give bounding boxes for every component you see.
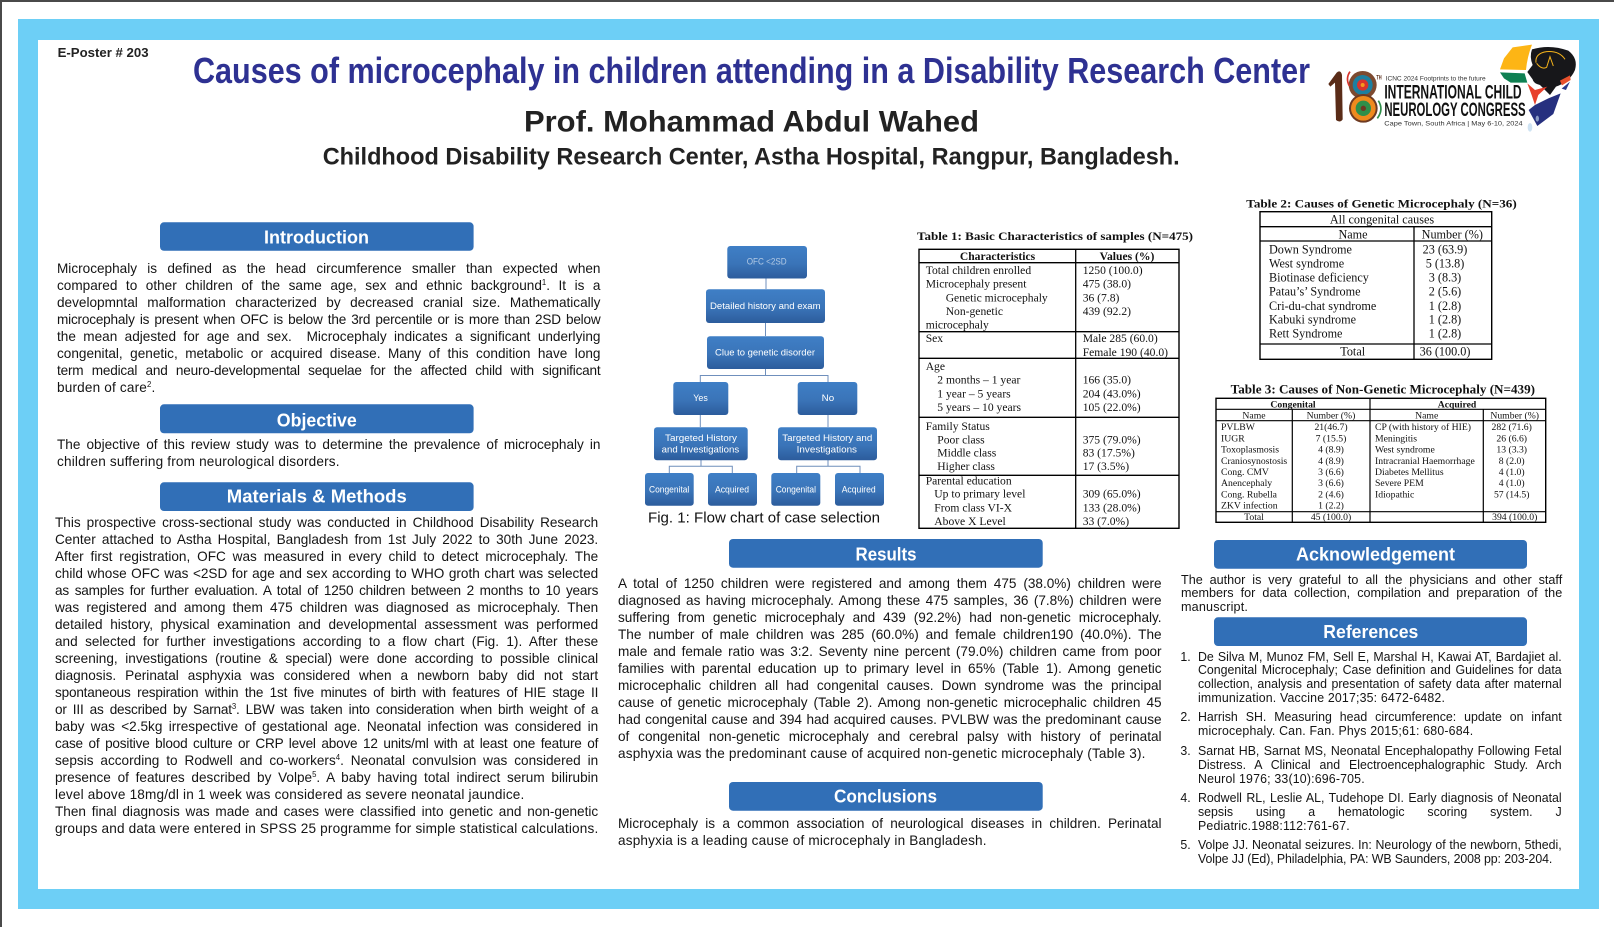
text: materials and methods: and selected for further investigations according to a flow chart (Fig. 1). After these [55, 633, 598, 649]
congress logo [1328, 45, 1576, 132]
table 2: Name [1338, 227, 1368, 241]
box: acquired 2: Acquired [842, 484, 876, 495]
heading: Objective [160, 404, 474, 433]
text: introduction: compared to other children of the same age, sex and ethnic background1. It is a [57, 277, 601, 293]
table 1 title: Table 1: Basic Characteristics of samples (N=475) [917, 229, 1193, 243]
text: materials and methods: groups and data were entered in SPSS 25 programme for simple statistical calculations. [55, 820, 598, 836]
references list: 4. [1181, 790, 1191, 805]
table 2: 1 (2.8) [1429, 299, 1461, 313]
text: acknowledgement [1181, 572, 1562, 614]
table 3: Congenital [1270, 399, 1316, 410]
heading: Results [729, 539, 1043, 568]
table 1: Genetic microcephaly [946, 292, 1048, 305]
table 1: 439 (92.2) [1083, 305, 1131, 318]
table 3 title: Table 3: Causes of Non-Genetic Microcephaly (N=439) [1231, 382, 1535, 396]
table 2: 1 (2.8) [1429, 326, 1461, 340]
reference 4: Rodwell RL, Leslie AL, Tudehope DI. Early diagnosis of Neonatal [1198, 790, 1562, 805]
reference 4 [1180, 790, 1562, 833]
table 3: 8 (2.0) [1499, 456, 1525, 467]
logo: text congress name line 1: INTERNATIONAL CHILD [1384, 82, 1522, 103]
box: clue to genetic disorder [707, 336, 824, 369]
table 2: Patau’s’ Syndrome [1269, 285, 1361, 299]
table 3: West syndrome [1375, 445, 1435, 456]
reference 1: De Silva M, Munoz FM, Sell E, Marshal H, Kawai AT, Bardajiet al. [1198, 649, 1562, 664]
reference 2: Harrish SH. Measuring head circumference: update on infant [1198, 709, 1562, 724]
box: OFC [727, 246, 807, 278]
reference 3: Neurol 1976; 33(10):696-705. [1198, 771, 1365, 786]
heading: Results: Results [856, 545, 916, 565]
table 3: 7 (15.5) [1316, 433, 1346, 444]
box: targeted history left [654, 427, 748, 460]
table 2: Down Syndrome [1269, 242, 1352, 256]
box: targeted history right: Targeted History and [782, 433, 872, 444]
text: materials and methods: case of positive blood culture or CRP level above 12 units/ml with at least one feature of [55, 735, 598, 751]
table 1: Middle class [937, 447, 997, 460]
poster number: E-Poster # 203 [58, 45, 149, 60]
references list: 1. [1181, 649, 1191, 664]
table 3: Cong. Rubella [1221, 489, 1278, 500]
box: congenital 1 [645, 473, 694, 506]
table 1: 133 (28.0%) [1083, 502, 1141, 515]
table 3: 282 (71.6) [1492, 422, 1532, 433]
text: materials and methods: Then final diagnosis was made and cases were classified into genetic and non-genetic [55, 803, 598, 819]
reference 3: Distress. A Clinical and Electroencephalographic Study. Arch [1198, 757, 1562, 772]
table 2: 5 (13.8) [1426, 256, 1464, 270]
table 3: Number (%) [1307, 411, 1355, 422]
logo: numeral 1 [1328, 71, 1343, 122]
box: targeted history left: Targeted History [665, 433, 737, 444]
table 3: 45 (100.0) [1311, 512, 1351, 523]
flow chart connectors [669, 278, 860, 473]
box: targeted history left: and Investigations [662, 444, 739, 455]
references list [1180, 649, 1562, 866]
text: introduction: burden of care2. [57, 379, 156, 395]
text: materials and methods: as samples for further evaluation. A total of 1250 children between 2 months to 10 years [55, 582, 598, 598]
table 2: 36 (100.0) [1420, 345, 1470, 359]
text: results: had congenital cause and 394 had acquired causes. PVLBW was the predominant cause [618, 711, 1162, 727]
table 3: Acquired [1438, 399, 1477, 410]
heading: Conclusions [729, 782, 1043, 811]
table 1: 475 (38.0) [1083, 278, 1131, 291]
box: clue to genetic disorder: Clue to genetic disorder [715, 348, 815, 359]
box: detailed history [706, 289, 825, 323]
table 1: Above X Level [934, 515, 1006, 528]
table 2: Cri-du-chat syndrome [1269, 299, 1376, 313]
table 3: Intracranial Haemorrhage [1375, 456, 1475, 467]
table 2 [1260, 212, 1492, 359]
table 3: Name [1242, 411, 1266, 422]
table 1: 204 (43.0%) [1083, 388, 1141, 401]
heading: References [1214, 617, 1527, 646]
table 2: All congenital causes [1330, 212, 1434, 226]
text: introduction: congenital, genetic, metabolic or acquired disease. Many of this condition have long [57, 345, 601, 361]
table 3: Number (%) [1490, 411, 1539, 422]
table 1: Characteristics [960, 250, 1036, 263]
table 3: Anencephaly [1221, 478, 1272, 489]
table 3: Name [1415, 411, 1438, 422]
box: targeted history right: Investigations [797, 444, 857, 455]
table 1: 36 (7.8) [1083, 292, 1120, 305]
reference 3 [1180, 743, 1562, 786]
heading: Materials and Methods: Materials & Methods [227, 487, 407, 507]
table 3: 21(46.7) [1314, 422, 1348, 433]
table 2: Rett Syndrome [1269, 326, 1342, 340]
box: congenital 2: Congenital [776, 484, 816, 495]
table 3: CP (with history of HIE) [1375, 422, 1471, 433]
heading: Acknowledgement [1214, 540, 1527, 569]
text: results: cause of genetic microcephaly (Table 2). Among non-genetic microcephalic children 45 [618, 694, 1162, 710]
reference 2: microcephaly. Can. Fan. Phys 2015;61: 680-684. [1198, 723, 1474, 738]
box: acquired 1 [708, 473, 757, 506]
table 3: Toxoplasmosis [1221, 445, 1279, 456]
text: results: asphyxia was the predominant cause of acquired non-genetic microcephaly (Table 3). [618, 745, 1146, 761]
text: results: microcephalic children all had congenital causes. Down syndrome was the principal [618, 677, 1162, 693]
text: materials and methods: presence of features described by Volpe5. A baby having total indirect serum bilirubin [55, 769, 598, 785]
reference 1 [1181, 649, 1562, 705]
table 1: 1250 (100.0) [1083, 264, 1143, 277]
text: introduction [57, 260, 601, 395]
heading: Introduction: Introduction [264, 227, 369, 247]
table 3: Craniosynostosis [1221, 456, 1287, 467]
text: materials and methods: child whose OFC was <2SD for age and sex according to WHO groth chart was selected [55, 565, 598, 581]
table 3: 4 (8.9) [1318, 445, 1344, 456]
text: results: diagnosed as having microcephaly. Among these 475 samples, 36 (7.8%) children were [618, 592, 1162, 608]
table 1 [919, 249, 1179, 528]
logo: upper ring [1349, 71, 1377, 99]
table 1: Up to primary level [934, 488, 1025, 501]
reference 2 [1181, 709, 1562, 738]
table 3: 4 (1.0) [1499, 467, 1525, 478]
text: materials and methods: Center attached to Astha Hospital, Bangladesh from 1st July 2022 to 30th June 2023. [55, 531, 598, 547]
table 2: Number (%) [1422, 227, 1483, 241]
text: objective: The objective of this review study was to determine the prevalence of microcephaly in [57, 436, 601, 452]
text: introduction: term medical and neuro-developmental sequelae for the affected child with significant [57, 362, 601, 378]
text: results: families with parental education up to primary level in 65% (Table 1). Among genetic [618, 660, 1162, 676]
logo: text ICNC: ICNC 2024 Footprints to the future [1386, 76, 1486, 83]
reference 1: Congenital Microcephaly; Case definition and Guidelines for data [1198, 662, 1562, 677]
table 1: 2 months – 1 year [937, 373, 1021, 386]
affiliation: Childhood Disability Research Center, Astha Hospital, Rangpur, Bangladesh. [323, 143, 1180, 170]
table 1: Family Status [926, 420, 990, 433]
table 3: 1 (2.2) [1318, 501, 1344, 512]
text: introduction: microcephaly is present when OFC is below the 3rd percentile or is more than 2SD below [57, 311, 601, 327]
text: materials and methods: was registered and among them 475 children was diagnosed as microcephaly. Then [55, 599, 598, 615]
reference 5 [1180, 837, 1562, 866]
table 3: Idiopathic [1375, 489, 1414, 500]
box: OFC: OFC <2SD [747, 257, 787, 268]
heading: Objective: Objective [277, 411, 357, 431]
table 1: Higher class [937, 460, 995, 473]
table 2: 23 (63.9) [1423, 242, 1467, 256]
reference 4: Pediatric.1988:112:761-67. [1198, 818, 1350, 833]
text: introduction: developmntal malformation characterized by decreased cranial size. Mathematically [57, 294, 601, 310]
box: congenital 1: Congenital [649, 484, 689, 495]
table 1: Total children enrolled [926, 264, 1031, 277]
text: materials and methods: baby was <2.5kg irrespective of gestational age. Neonatal infection was considered in [55, 718, 598, 734]
logo: africa map and head [1500, 45, 1576, 132]
table 3: 57 (14.5) [1494, 489, 1529, 500]
table 3: 3 (6.6) [1318, 478, 1344, 489]
table 3: IUGR [1221, 433, 1245, 444]
text: materials and methods: After first registration, OFC was measured in every child to detect microcephaly. The [55, 548, 598, 564]
table 3 [1216, 398, 1546, 523]
text: acknowledgement: members for data collection, compilation and preparation of the [1181, 585, 1562, 600]
reference 3: Sarnat HB, Sarnat MS, Neonatal Encephalopathy Following Fetal [1198, 743, 1562, 758]
text: results: suffering from genetic microcephaly and 439 (92.2%) had non-genetic microcephaly. [618, 609, 1162, 625]
text: materials and methods: spontaneous respiration within the 1st five minutes of birth with features of HIE stage II [55, 684, 598, 700]
table 2: Total [1340, 345, 1366, 359]
flow chart [645, 246, 884, 506]
logo: arcs [1347, 72, 1381, 118]
text: results: of congenital non-genetic microcephaly and cerebral palsy with history of perinatal [618, 728, 1162, 744]
box: acquired 1: Acquired [715, 484, 749, 495]
table 1: From class VI-X [934, 502, 1013, 515]
logo: lower ring [1349, 94, 1378, 123]
table 3: Cong. CMV [1221, 467, 1269, 478]
box: detailed history: Detailed history and exam [710, 301, 821, 312]
table 2: 1 (2.8) [1429, 312, 1461, 326]
text: objective: children suffering from neurological disorders. [57, 453, 340, 469]
text: acknowledgement: The author is very grateful to all the physicians and other staff [1181, 572, 1562, 587]
text: results: The number of male children was 285 (60.0%) and female children190 (40.0%). The [618, 626, 1162, 642]
references list: 5. [1181, 837, 1191, 852]
table 1: 33 (7.0%) [1083, 515, 1129, 528]
text: materials and methods: level above 18mg/dl in 1 week was considered as severe neonatal jaundice. [55, 786, 524, 802]
heading: References: References [1323, 622, 1418, 642]
box: no: No [822, 393, 834, 404]
table 1: Values (%) [1100, 250, 1154, 263]
table 1: 1 year – 5 years [937, 388, 1011, 401]
table 1: 5 years – 10 years [937, 401, 1021, 414]
text: materials and methods [55, 514, 598, 836]
text: acknowledgement: manuscript. [1181, 599, 1248, 614]
text: materials and methods: diagnosis. Perinatal asphyxia was considered when a newborn baby did not start [55, 667, 598, 683]
table 1: 166 (35.0) [1083, 373, 1131, 386]
text: results: A total of 1250 children were registered and among them 475 (38.0%) children were [618, 575, 1162, 591]
box: targeted history right [778, 427, 877, 460]
table 3: 4 (1.0) [1499, 478, 1525, 489]
heading: Introduction [160, 222, 474, 251]
text: conclusions: asphyxia is a leading cause of microcephaly in Bangladesh. [618, 832, 987, 848]
reference 1: collection, analysis and presentation of safety data after maternal [1198, 676, 1562, 691]
table 2: Kabuki syndrome [1269, 312, 1356, 326]
author: Prof. Mohammad Abdul Wahed [524, 106, 979, 139]
table 1: Microcephaly present [926, 278, 1027, 291]
table 3: Total [1244, 512, 1264, 523]
text: materials and methods: sepsis according to Rodwell and co-workers4. Neonatal convulsion was considered in [55, 752, 598, 768]
table 1: microcephaly [926, 318, 989, 331]
table 1: Sex [926, 332, 943, 345]
table 1: Parental education [926, 474, 1012, 487]
text: conclusions [618, 815, 1162, 848]
references list: 2. [1181, 709, 1191, 724]
table 1: 375 (79.0%) [1083, 433, 1141, 446]
text: introduction: Microcephaly is defined as the head circumference smaller than expected when [57, 260, 601, 276]
text: materials and methods: detailed history, physical examination and developmental assessment was performed [55, 616, 598, 632]
table 1: Male 285 (60.0) [1083, 332, 1158, 345]
title: Causes of microcephaly in children attending in a Disability Research Center [193, 50, 1310, 91]
reference 4: sepsis using a hematologic scoring system. J [1198, 804, 1562, 819]
box: yes: Yes [693, 393, 708, 404]
table 3: 394 (100.0) [1492, 512, 1537, 523]
text: materials and methods: This prospective cross-sectional study was conducted in Childhood Disability Research [55, 514, 598, 530]
table 2: 3 (8.3) [1429, 271, 1461, 285]
text: introduction: the mean adjested for age and sex. Microcephaly indicates a significant underlying [57, 328, 601, 344]
table 1: Female 190 (40.0) [1083, 346, 1168, 359]
table 2: Biotinase deficiency [1269, 271, 1370, 285]
heading: Materials and Methods [160, 482, 474, 511]
table 1: 17 (3.5%) [1083, 460, 1129, 473]
box: congenital 2 [771, 473, 820, 506]
text: materials and methods: or III as described by Sarnat3. LBW was taken into consideration when birth weight of a [55, 701, 598, 717]
table 2: 2 (5.6) [1429, 285, 1461, 299]
table 3: ZKV infection [1221, 501, 1278, 512]
table 1: 83 (17.5%) [1083, 447, 1135, 460]
table 2 title: Table 2: Causes of Genetic Microcephaly (N=36) [1246, 196, 1517, 210]
references list: 3. [1181, 743, 1191, 758]
table 1: Non-genetic [946, 305, 1003, 318]
text: results [618, 575, 1162, 761]
table 3: 13 (3.3) [1496, 445, 1527, 456]
table 3: Severe PEM [1375, 478, 1424, 489]
table 3: 26 (6.6) [1496, 433, 1527, 444]
text: materials and methods: screening, investigations (routine & special) were done according to possible clinical [55, 650, 598, 666]
reference 5: Volpe JJ (Ed), Philadelphia, PA: WB Saunders, 2008 pp: 203-204. [1198, 851, 1553, 866]
reference 5: Volpe JJ. Neonatal seizures. In: Neurology of the newborn, 5thedi, [1198, 837, 1562, 852]
figure caption: Fig. 1: Flow chart of case selection [648, 511, 880, 527]
table 3: 2 (4.6) [1318, 489, 1344, 500]
table 3: Diabetes Mellitus [1375, 467, 1444, 478]
table 3: PVLBW [1221, 422, 1256, 433]
table 1: Age [926, 360, 945, 373]
heading: Acknowledgement: Acknowledgement [1296, 545, 1455, 565]
box: no [798, 382, 857, 415]
logo: ordinal suffix: TH [1376, 75, 1382, 81]
table 1: 105 (22.0%) [1083, 401, 1141, 414]
text: conclusions: Microcephaly is a common association of neurological diseases in children. Perinatal [618, 815, 1162, 831]
table 1: Poor class [937, 433, 985, 446]
reference 1: immunization. Vaccine 2017;35: 6472-6482. [1198, 690, 1445, 705]
box: yes [673, 382, 728, 415]
heading: Conclusions: Conclusions [834, 787, 937, 807]
text: objective [57, 436, 601, 469]
text: results: male and female ratio was 3:2. Seventy nine percent (79.0%) children came from poor [618, 643, 1162, 659]
table 3: Meningitis [1375, 433, 1417, 444]
table 3: 4 (8.9) [1318, 456, 1344, 467]
table 3: 3 (6.6) [1318, 467, 1344, 478]
logo: location: Cape Town, South Africa | May 6-10, 2024 [1384, 120, 1523, 127]
table 1: 309 (65.0%) [1083, 488, 1141, 501]
table 2: West syndrome [1269, 256, 1344, 270]
box: acquired 2 [835, 473, 884, 506]
